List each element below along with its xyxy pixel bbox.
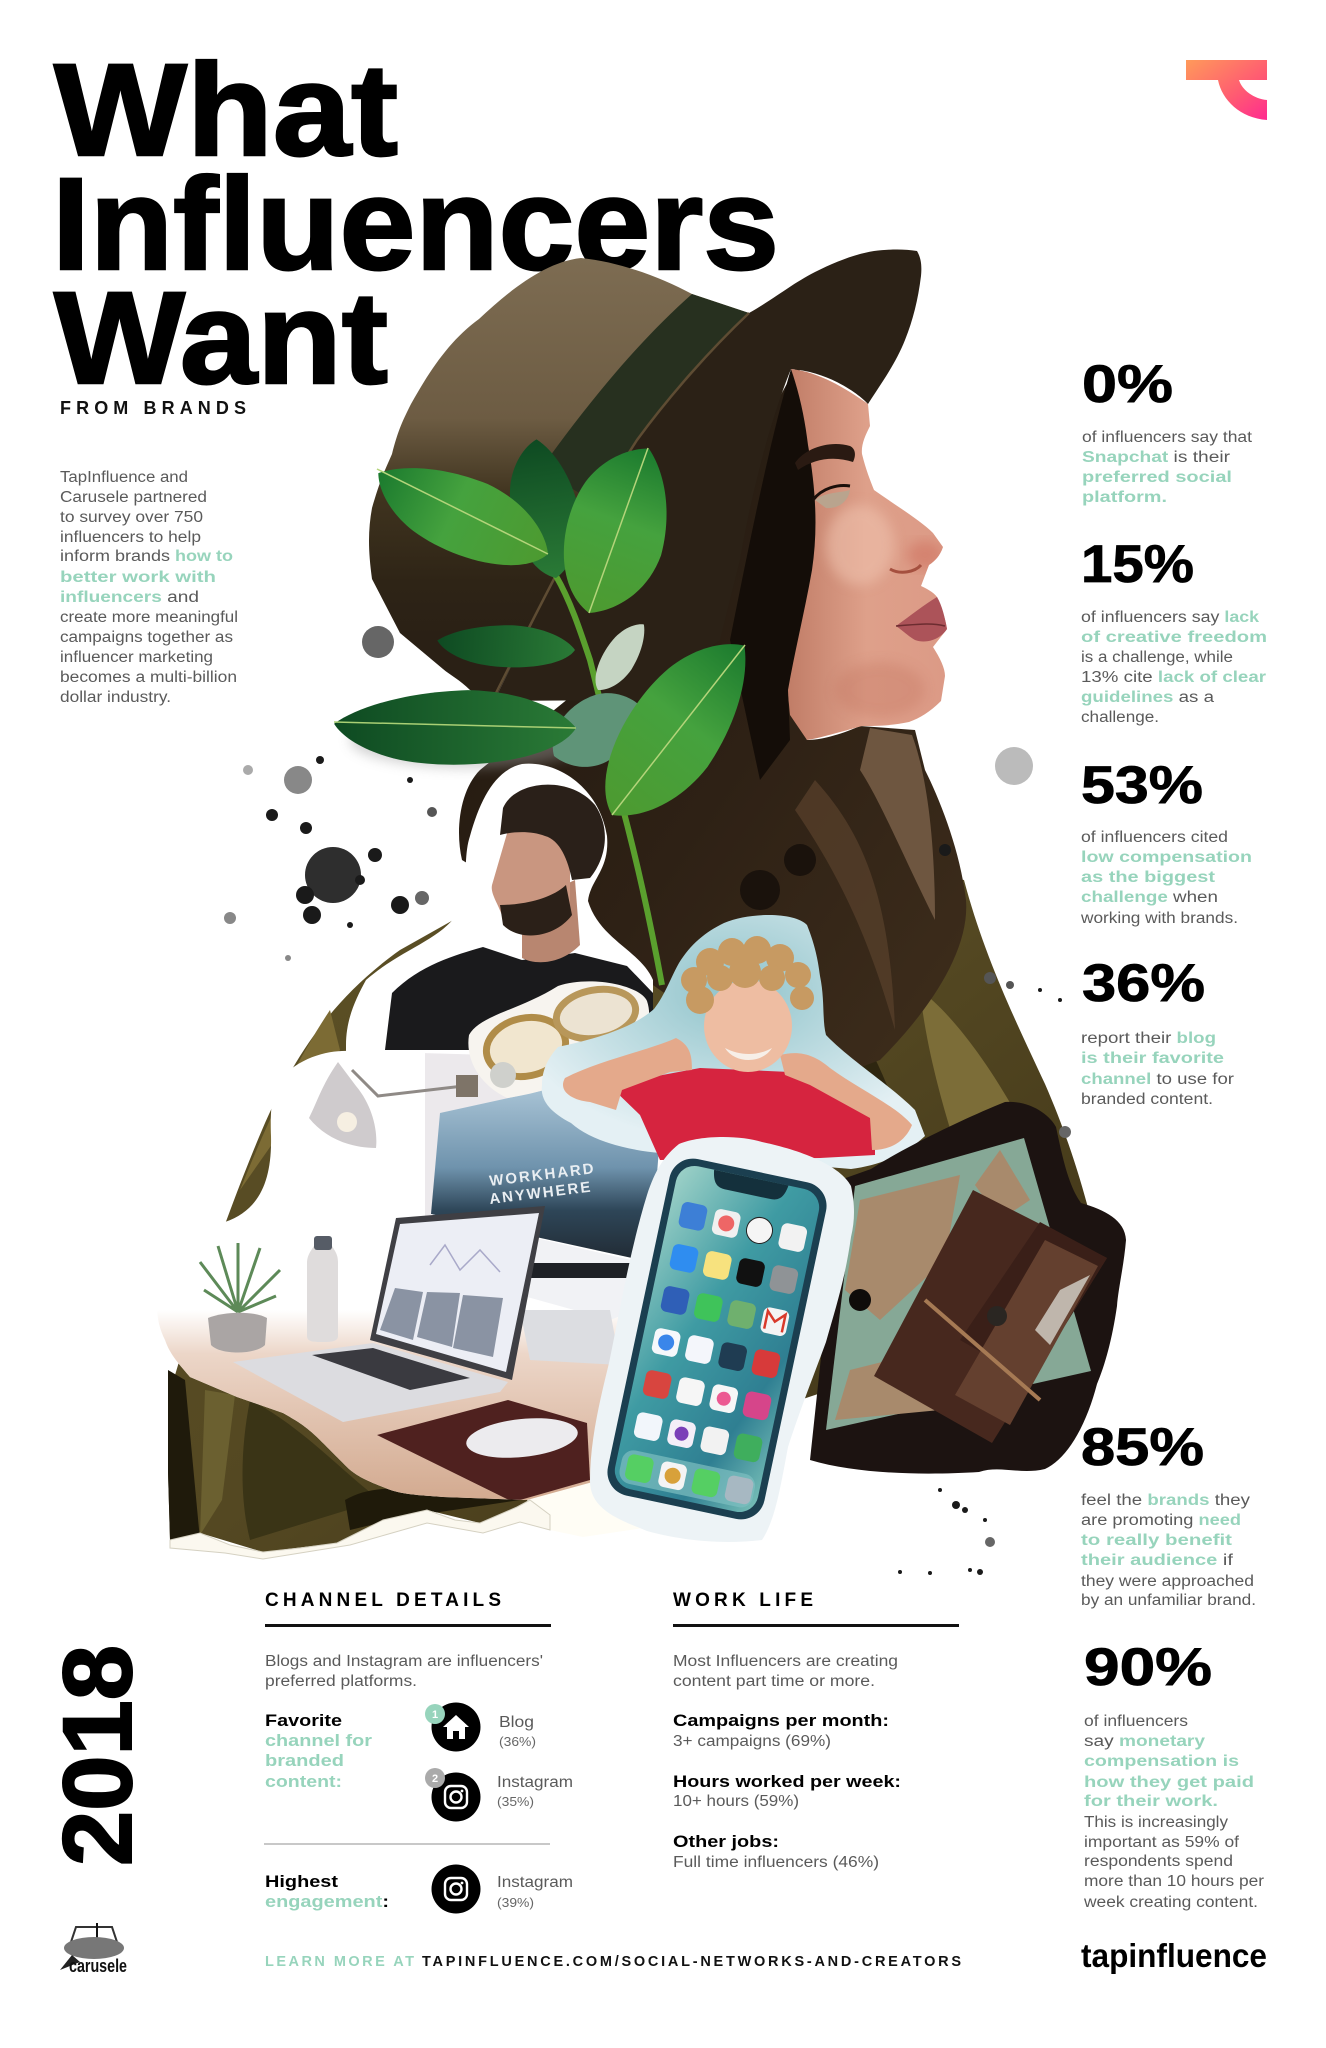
highest engagement label — [265, 1872, 389, 1911]
stat: 90%: important as 59% of — [1084, 1834, 1240, 1851]
instagram label: (35%) — [497, 1794, 534, 1809]
t-shirt — [385, 947, 653, 1050]
wall — [425, 1053, 510, 1216]
stat: 90%: week creating content. — [1083, 1894, 1258, 1911]
shirt — [609, 1068, 875, 1160]
highest engagement label: Highest — [265, 1872, 338, 1891]
monitor: ANYWHERE — [488, 1178, 593, 1208]
panel: work life: 3+ campaigns (69%) — [673, 1733, 831, 1750]
intro paragraph: influencer marketing — [60, 649, 213, 666]
blog label: Blog — [499, 1714, 534, 1731]
stat: 0%: Snapchat is their — [1082, 449, 1230, 466]
stat: 90%: for their work. — [1084, 1793, 1218, 1810]
panel: work life: Most Influencers are creating — [673, 1653, 898, 1670]
app icons — [633, 1201, 808, 1463]
man cut-out — [346, 764, 653, 1060]
icon: instagram engagement — [432, 1864, 480, 1914]
stat: 36% — [1081, 954, 1234, 1108]
title: Influencers — [52, 150, 779, 297]
instagram label: Instagram — [497, 1774, 573, 1791]
intro paragraph: dollar industry. — [60, 689, 171, 706]
intro paragraph: Carusele partnered — [60, 489, 207, 506]
panel: work life: Campaigns per month: — [673, 1711, 889, 1730]
stat: 0%: 0% — [1082, 355, 1173, 414]
footer link: LEARN MORE AT — [265, 1954, 414, 1970]
stat: 53%: working with brands. — [1080, 910, 1238, 927]
eye and brow — [795, 444, 855, 508]
intro paragraph: becomes a multi-billion — [60, 669, 237, 686]
desk surface — [158, 1316, 618, 1500]
laptop — [233, 1206, 545, 1422]
stat: 0% — [1082, 355, 1253, 506]
crown — [369, 258, 749, 701]
title: What — [54, 36, 398, 183]
stat: 53%: 53% — [1081, 756, 1203, 815]
neck — [522, 880, 580, 962]
stat: 85%: are promoting need — [1081, 1512, 1241, 1529]
stat: 15%: of influencers say lack — [1081, 609, 1259, 626]
stat: 85%: to really benefit — [1081, 1532, 1232, 1549]
bottle — [307, 1236, 338, 1342]
stem — [534, 554, 662, 985]
stat: 90% — [1083, 1638, 1264, 1911]
hair — [500, 785, 605, 880]
panel: channel details: preferred platforms. — [265, 1673, 417, 1690]
panel: work life: 10+ hours (59%) — [673, 1793, 799, 1810]
stat: 85%: they were approached — [1081, 1573, 1254, 1590]
rings cut-out — [468, 981, 649, 1098]
stat: 85%: feel the brands they — [1081, 1492, 1250, 1509]
stat: 53%: as the biggest — [1081, 869, 1215, 886]
desk scene — [150, 1050, 680, 1510]
stat: 36%: is their favorite — [1081, 1050, 1224, 1067]
stat: 85%: 85% — [1081, 1418, 1204, 1477]
intro paragraph: better work with — [60, 569, 216, 586]
plant — [333, 431, 780, 985]
hair — [459, 360, 966, 1090]
instagram engagement label — [497, 1874, 573, 1910]
icon: instagram rank 2: 2 — [432, 1773, 438, 1785]
stat: 0%: preferred social — [1082, 469, 1232, 486]
lamp — [309, 1062, 478, 1148]
stat: 85% — [1081, 1418, 1256, 1609]
logo: carusele: carusele — [69, 1956, 127, 1976]
stat: 53%: low compensation — [1081, 849, 1252, 866]
panel: work life: Full time influencers (46%) — [673, 1854, 879, 1871]
logo: tapinfluence: tapinfluence — [1081, 1937, 1267, 1974]
stat: 53%: challenge when — [1081, 889, 1218, 906]
instagram label — [497, 1774, 573, 1809]
title: Want — [54, 264, 388, 411]
beard — [500, 885, 572, 935]
panel: channel details — [264, 1590, 573, 1914]
stat: 15%: of creative freedom — [1081, 629, 1267, 646]
stat: 15%: 15% — [1081, 535, 1194, 594]
dock — [617, 1448, 757, 1510]
torn paper edge — [170, 1500, 550, 1559]
hair highlight — [860, 728, 935, 920]
arms — [563, 1038, 692, 1110]
stat: 15%: guidelines as a — [1081, 689, 1214, 706]
title — [52, 36, 779, 411]
stat: 15%: challenge. — [1081, 709, 1159, 726]
icon: instagram rank 2 — [425, 1768, 480, 1822]
stat: 15%: 13% cite lack of clear — [1081, 669, 1266, 686]
map and notebook — [810, 1102, 1126, 1474]
brim — [494, 250, 921, 701]
favorite channel label — [265, 1711, 372, 1791]
stat: 53%: of influencers cited — [1081, 829, 1228, 846]
leaves — [333, 431, 780, 843]
stat: 85%: their audience if — [1081, 1552, 1234, 1569]
favorite channel label: Favorite — [265, 1711, 342, 1730]
intro paragraph: campaigns together as — [60, 629, 233, 646]
collage: woman figure — [168, 250, 1100, 1560]
logo: carusele — [60, 1923, 127, 1976]
stat: 36%: branded content. — [1081, 1091, 1213, 1108]
intro paragraph: inform brands how to — [60, 548, 233, 565]
icon: blog home: 1 — [432, 1709, 438, 1721]
mouse — [466, 1418, 578, 1458]
panel: work life: Hours worked per week: — [673, 1772, 901, 1791]
stat: 15% — [1081, 535, 1267, 726]
stat: 90%: more than 10 hours per — [1084, 1873, 1264, 1890]
stat: 36%: channel to use for — [1081, 1071, 1234, 1088]
highest engagement label: engagement : — [265, 1892, 389, 1911]
phone — [603, 1154, 831, 1524]
hat — [369, 250, 921, 701]
phone cut-out — [590, 1137, 854, 1542]
stat: 36%: report their blog — [1081, 1030, 1216, 1047]
notebook — [874, 1190, 1107, 1443]
intro paragraph: influencers and — [60, 589, 199, 606]
stat: 36%: 36% — [1082, 954, 1205, 1013]
monitor: WORKHARD — [488, 1160, 597, 1190]
blog label: (36%) — [499, 1734, 536, 1749]
intro paragraph: influencers to help — [60, 529, 201, 546]
blog label — [499, 1714, 536, 1749]
mouse pad — [377, 1400, 590, 1502]
panel: work life: WORK LIFE — [673, 1590, 813, 1611]
jacket — [168, 880, 1088, 1552]
logo: tapinfluence mark — [1186, 60, 1267, 120]
map — [826, 1138, 1091, 1430]
stat: 53% — [1080, 756, 1252, 927]
neck and face — [786, 369, 947, 740]
panel: channel details: Blogs and Instagram are influencers' — [265, 1653, 543, 1670]
stat: 90%: of influencers — [1084, 1713, 1188, 1730]
hair strand — [730, 369, 815, 780]
stat: 90%: This is increasingly — [1084, 1814, 1228, 1831]
face — [704, 980, 792, 1072]
favorite channel label: branded — [265, 1751, 344, 1770]
panel: channel details: CHANNEL DETAILS — [265, 1590, 501, 1611]
lips and nostril — [890, 565, 947, 642]
intro paragraph: create more meaningful — [60, 609, 238, 626]
curly hair — [681, 936, 814, 1014]
panel: work life: content part time or more. — [673, 1673, 875, 1690]
potted plant — [200, 1243, 280, 1352]
favorite channel label: channel for — [265, 1731, 372, 1750]
subtitle: FROM BRANDS — [60, 398, 246, 418]
stat: 90%: how they get paid — [1084, 1774, 1254, 1791]
ink splashes — [224, 626, 1071, 1575]
stat: 90%: compensation is — [1084, 1753, 1239, 1770]
panel: work life — [673, 1590, 959, 1871]
band — [540, 294, 749, 505]
stat: 90%: respondents spend — [1084, 1853, 1233, 1870]
instagram engagement label: (39%) — [497, 1895, 534, 1910]
icon: blog home — [425, 1702, 480, 1752]
boy cut-out — [542, 915, 925, 1169]
face — [492, 823, 570, 934]
footer link: TAPINFLUENCE.COM/SOCIAL-NETWORKS-AND-CREATORS — [422, 1954, 961, 1970]
stat: 90%: 90% — [1084, 1638, 1212, 1697]
cream paper behind phone — [527, 1480, 760, 1537]
stat: 0%: of influencers say that — [1082, 429, 1253, 446]
monitor — [430, 1090, 660, 1365]
panel: work life: Other jobs: — [673, 1832, 779, 1851]
intro paragraph: TapInfluence and — [60, 469, 188, 486]
leaf shadow — [350, 712, 590, 768]
stat: 0%: platform. — [1082, 489, 1167, 506]
year: 2018: 2018 — [43, 1645, 152, 1866]
favorite channel label: content: — [265, 1772, 342, 1791]
stat: 15%: is a challenge, while — [1081, 649, 1233, 666]
instagram engagement label: Instagram — [497, 1874, 573, 1891]
face highlight and nose shade — [826, 505, 943, 718]
stat: 85%: by an unfamiliar brand. — [1081, 1592, 1256, 1609]
stat: 90%: say monetary — [1084, 1733, 1205, 1750]
intro paragraph: to survey over 750 — [60, 509, 203, 526]
intro paragraph — [60, 469, 238, 706]
